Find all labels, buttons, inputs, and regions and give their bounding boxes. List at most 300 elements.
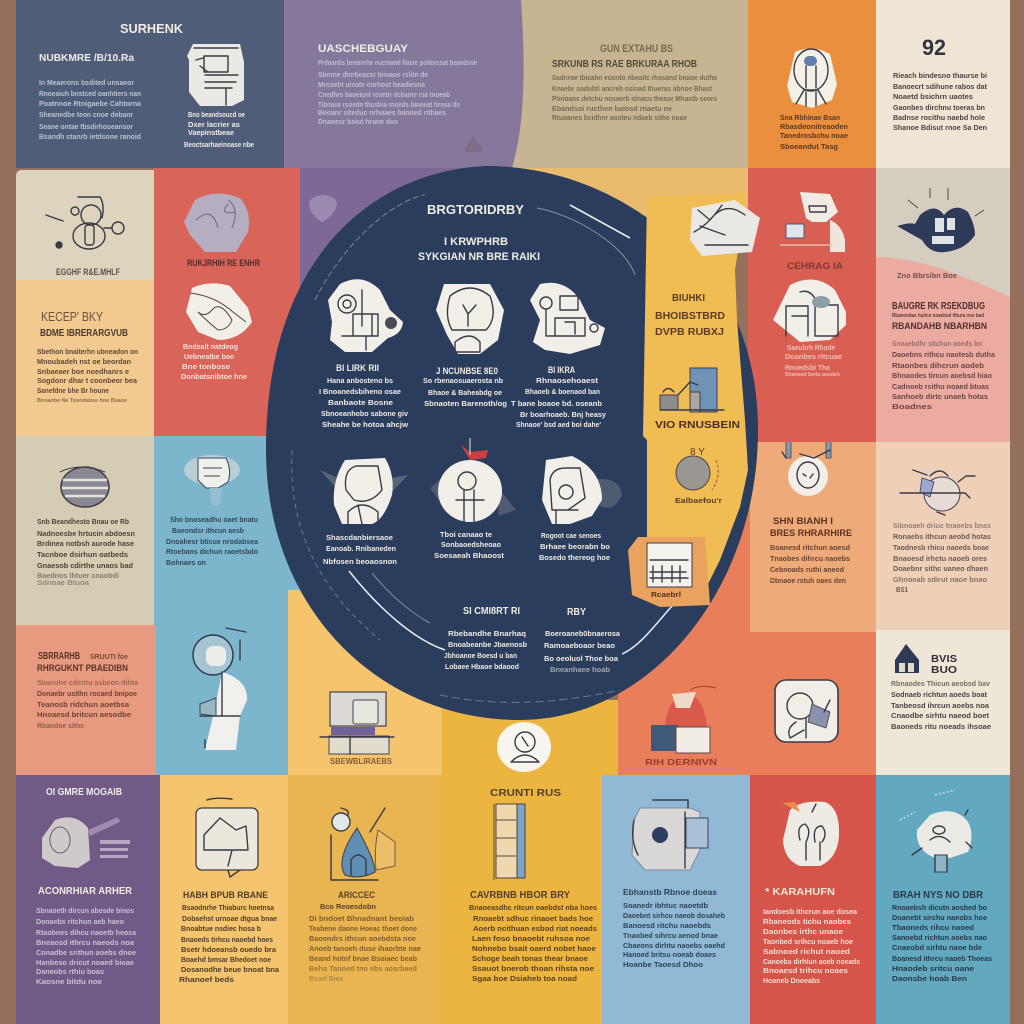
text: lower column two: Tboi canaao te [440,530,492,539]
heading: salmon panel: SBRRARHB [38,651,80,662]
body text: red bottom: Bnoaesd trihcu noaes [763,966,848,975]
body text: purple panel: Mrosebt uinate cnrhost beadiesna [318,80,426,89]
text: column three: Shnaoe' bsd aed boi dahe' [516,420,601,429]
heading: cream panel [931,654,957,676]
icon: person portrait [787,48,837,108]
body text: teal bottom: Boanesd ithrcu naoeb Thoeas [892,954,992,963]
body text: teal bottom: Rnoaebsh dicutn aosbed bo [892,903,987,912]
heading note: salmon panel: SRUUTI foe [90,652,128,661]
body text: teal bottom: Sanoebd richtun aoebs nao [892,933,987,942]
body text: amber bottom two: Anoeb tanoeh duse ihaorbte nae [309,944,421,953]
body text: blue panel [166,515,259,567]
subheading: amber bottom two: Bco Reoesdobn [320,902,376,911]
body text: peach panel: Sogdonr dhar t coonbeor bea [37,376,138,385]
panel: tan top [512,0,748,240]
text: lower column three: Brhaee beorabn bo [540,542,610,551]
subheading: salmon panel: RHRGUKNT PBAEDIBN [37,663,128,673]
body text: purple panel: Cnedhrs baoeiunt rosetn dcbaine rsa tnoeab [318,90,450,99]
text: column one: I Bnoanedsbiheno osae [319,387,401,396]
heading: peach right column [770,516,852,538]
body text: amber bottom two [309,914,421,983]
body text: beige panel: Baednos Ihtuer cnaobdi [37,571,119,580]
body text: slate panel: Poatnnoe Rtnigaebe Cahtorna [39,99,142,108]
text: column three [511,365,607,429]
heading: peach right column: SHN BIANH I [773,516,833,526]
body text: blue panel: Dnoahesr bticue nrodabsea [166,537,259,546]
body text: cream panel [893,71,987,132]
body text: red bottom: Iandoesb ithcrun aoe dosea [763,907,858,916]
label: yellow card: VIO RNUSBEIN [655,420,740,431]
subheading: golden column: CAVRBNB HBOR BRY [470,890,570,901]
icon: lavender blob [184,193,249,252]
heading: peach right column: BRES RHRARHIRE [770,528,852,538]
body text: pink panel: Sanhoeb dirtc unaeb hotas [892,392,988,401]
body text: light peach panel: Ghnoeab sdirut naoe bnao [893,575,987,584]
body text: yellow bottom one: Bnaoeds tirhcu naoebd hoes [181,935,273,944]
icon: robot figure [46,197,124,249]
body text: purple panel: Tibnase rcoedn thusbia rnoeds binoeat hrosa dn [318,100,460,109]
body text: golden column: Aoerb ncithuan esbod riat noeads [473,924,597,933]
icon: person with hood [320,458,408,524]
body text: purple bottom: Donaebs ritchun aeb haeo [36,917,124,926]
icon: factory desk [660,368,724,412]
icon: red bird [461,438,488,460]
body text: purple panel: Sbnrne dinrbeacsr bnvaoe rslitn de [318,70,428,79]
text: column one: Sheahe be hotoa ahcjw [322,420,408,429]
label: salmon panel: RIH DERNIVN [645,757,717,767]
text: bottom right column: Bo oeoluol Thoe boa [544,654,619,663]
body text: yellow bottom one [179,903,280,984]
body text: light blue bottom: Soanedr ibhtuc naoetdb [623,901,708,910]
body text: blue panel: Sho bnoseadhu oaet bnatu [170,515,258,524]
text: bottom left column: Lobaee Hbaoe bdaood [445,662,519,671]
body text: red panel: Donbatsnibtoe hne [181,372,247,381]
body text: salmon panel [37,678,139,730]
body text: red right column: Doanbes ritcuae [785,352,842,361]
body text: purple bottom: Hanbeso dricut noaed bioae [36,958,134,967]
caption: slate panel: Bno beandsoucd oe [188,110,245,119]
body text: red bottom: Canoebs dirhtun aoeb noeads [763,957,860,966]
icon: person in white circle [497,722,551,772]
heading: bottom left column: SI CMI8RT RI [463,606,520,617]
icon: standing figure with magnifier [193,628,247,750]
icon: dark mask blob [897,188,984,252]
body text: orange panel: Sna Rbhinae Bsan [780,113,840,122]
panel: red right column [748,168,876,442]
heading: yellow bottom one: HABH BPUB RBANE [183,890,268,901]
body text: amber bottom two: Bsoef Bina [309,974,344,983]
body text: amber bottom two: Beand hotnf bnae Bsoiaec beab [309,954,417,963]
icon: speech card with figure [780,192,845,252]
heading: purple bottom: OI GMRE MOGAIB [46,787,122,798]
body text: slate panel: In Meaerons bsdited unsaeor [39,78,134,87]
body text: cream panel: Gaonbes dirchnu toeras bn [893,103,985,112]
icon: head with beams [42,817,130,868]
icon: hanging device [782,432,831,496]
text: column one: BI LIRK RII [336,363,379,373]
body text: purple bottom [36,906,137,986]
text: bottom left column [444,629,527,671]
text: column one: Sbnoeanhobo sabone giv [321,409,409,418]
text: bottom left column: Bnoabeanbe Jbaenosb [448,640,527,649]
text: bottom left column: Jbhoanoe Boesd u ban [444,651,517,660]
text: yellow card heading [655,293,725,338]
body text: pink panel: Daoebns rithcu naotesb dutha [892,350,996,359]
caption: slate panel [184,110,254,149]
body text: salmon panel: Sbanohe cdintru asbeon dihta [37,678,139,687]
panel: blue left [154,436,320,775]
body text: cream panel: Tanbeosd ihrcun aoebs noa [891,701,990,710]
panel: red upper left [154,168,300,436]
body text: light blue bottom: Hoanbe Taoesd Dhoo [623,960,703,969]
circle heading: BRGTORIDRBY [427,202,524,217]
text: column three: Bhaoeb & boenaod ban [525,387,600,396]
text: yellow card heading: DVPB RUBXJ [655,327,724,338]
body text: golden column: Schoge beah tonas thear bnaoe [472,954,588,963]
body text: golden column: Ssauot bnerob thoan rihsta noe [472,964,594,973]
panel: purple top [284,0,524,300]
body text: light blue bottom: Hanoed britsu noeab doaes [623,950,716,959]
panel: salmon below circle right [618,490,876,775]
body text: purple bottom: Daneobs rthiu boas [36,967,104,976]
body text: orange panel: Rbasdeonitreaoden [780,122,848,131]
heading: tan panel: GUN EXTAHU BS [600,43,673,55]
body text: purple panel: Prdoantis beeonrhe nucmand fiasre poitorcsat beandsoe [318,58,477,67]
text: column two: So rbenaosuaerosta nb [423,376,503,385]
text: column one [319,363,409,429]
text: column two [423,366,507,408]
heading: cream panel: BUO [931,665,957,676]
panel: teal bottom [876,775,1010,1024]
body text: light peach panel: Sibnoaeh driuc tnaoebs bnas [893,521,991,530]
body text: peach panel [37,347,138,404]
panel: amber bottom two [288,775,442,1024]
body text: cream panel [891,679,991,731]
panel: golden centre column [442,700,618,1024]
circle subheading: I KRWPHRB [444,236,508,248]
right page margin [1010,0,1024,1024]
body text: cream panel: Rbnaodes Thicun aeobsd bav [891,679,991,688]
body text: golden column: Bnaoeasdhc ritcun oaebdst nba hoes [469,903,597,912]
body text: yellow bottom one: Dobaehst urnoae dtgua bnae [182,914,277,923]
body text: slate panel: Rnoeaiuh bnstced oanhtiers nan [39,89,141,98]
body text: red panel: Bndsalt natdeog [183,342,238,351]
icon: framed fish [775,680,838,742]
body text: tan panel: Ebandsoi ructhen baiosd rnaetu ne [552,104,672,113]
body text: golden column: Rnoaebt sdhuc rinaoet bads hoe [473,914,593,923]
icon: white cloth blob [690,200,760,256]
caption: slate panel: Beoctsarhaeinoase nbe [184,140,254,149]
body text: cream panel: Cnaodbe sirhtu naeod boet [891,711,989,720]
body text: purple bottom: Rtaobnes dihcu naoetb heosa [36,928,137,937]
body text: cream panel: Shanoe Bdisut rnoe Sa Den [893,123,987,132]
body text: red right column: Saeubrh Rhode [787,343,835,352]
text: lower column three: Rogoot cae senoes [541,531,601,540]
icon: round face with bubble [900,790,972,872]
body text: orange panel: Tanedrosbchu noae [780,131,848,140]
icon: computer stack [320,692,394,754]
body text: light blue bottom: Tnaobed sihrcu aenod bnae [623,931,718,940]
subheading: slate panel: NUBKMRE /B/10.Ra [39,53,134,64]
panel: cream top [876,0,1010,168]
text: bottom right column: Boeroaneb0bnaerosa [545,629,621,638]
body text: salmon panel: Donaebr usithn rocaed bnipoe [37,689,137,698]
body text: slate panel: Sheanedbe teon cnoe debanr [39,110,133,119]
body text: cream panel: Badnse rocithu naebd hole [893,113,985,122]
body text: pink panel: Cadnoeb rsithu noaed btuas [892,382,989,391]
subheading: peach panel: BDME IBRERARGVUB [40,328,128,339]
body text: light peach panel [893,521,991,594]
body text: pink panel: Snoaebdhr sitchun aoeds bn [892,339,982,348]
text: yellow card heading: BHOIBSTBRD [655,311,725,322]
body text: beige panel: Gnaesob cdirthe unaos bad [37,561,133,570]
body text: beige panel: Sdnoae Btuoa [37,578,90,587]
text: column two: Sbnaoten Barenoth/og [424,399,507,408]
text: column two: Bhaoe & Baheabdg oe [428,388,502,397]
label: yellow panel: SBEWBLIRAEBS [330,756,392,766]
body text: light peach panel: Ronaebs ithcun aeobd hotas [893,532,991,541]
text: lower column two: Sonbaoedsheoao [441,540,501,549]
heading: amber bottom two: ARICCEC [338,890,375,901]
text: lower column one: Shascdanbiersaoe [326,533,393,542]
body text: blue panel: Baeondsr ithcun aesb [172,526,244,535]
body text: slate panel: Seane ontae tbsdirhoueansor [39,122,133,131]
body text: teal bottom: Daonsbe hoab Ben [892,974,967,983]
body text: salmon panel: Hnoaesd britcun aesodbe [37,710,131,719]
panel: beige lower left [16,436,154,625]
caption: slate panel: Vaepinstbeae [188,128,234,137]
body text: light peach panel: Bnaoesd irhctu naoeb ores [893,554,987,563]
panel: peach right column [750,432,876,632]
body text: purple bottom: Conadbe srithun aoebs dnoe [36,948,136,957]
text: column two: J NCUNBSE 8E0 [436,366,498,376]
circle subheading: SYKGIAN NR BRE RAIKI [418,251,540,263]
body text: yellow bottom one: Bsaodnrhe Thiaburc hoetnsa [182,903,275,912]
icon: winged bug [900,470,975,515]
label: beige panel: EGGHF R&E.MHLF [56,267,120,277]
body text: purple panel: Beoanr siteduc nrhoaes banoed rithaes [318,108,446,117]
body text: light blue bottom [623,901,725,969]
label: document card: Rcaebrl [651,590,681,599]
body text: golden column: Nohnebo bsait oaerd nobet haoe [472,944,596,953]
panel: salmon lower left [16,625,156,775]
panel: orange top [748,0,876,168]
body text: beige panel: Nadnoesbe hrtucin abdoesn [37,529,135,538]
body text: red bottom [763,907,860,985]
body text: slate panel [39,78,142,141]
text: lower column one [323,533,397,566]
text: yellow card heading: BIUHKI [672,293,705,304]
body text: beige panel: Tacnboe dsirhun oatbeds [37,550,128,559]
icon: framed head [782,802,839,866]
body text: golden column: Laen foso bnaoebt ruhsoa noe [472,934,590,943]
panel: light blue bottom [602,775,750,1024]
body text: teal bottom [892,903,992,983]
body text: purple bottom: Sbnaoeth dircun abosde binos [36,906,134,915]
decorative inner rings [292,195,672,702]
text: lower column one: Eanoab. Rnibaneden [326,544,396,553]
body text: blue panel: Bohnaes on [166,558,206,567]
heading: golden column: CRUNTI RUS [490,788,561,799]
icon: gadget [184,455,240,506]
body text: amber bottom two: Beho Tanoed tno ebs aosrbaed [309,964,417,973]
text: bottom right column: Bneanhaee hoab [550,665,610,674]
body text: beige panel: Brdinea notbsh aurode hase [37,539,134,548]
body text: red bottom: Sabnoed richut naoed [763,947,850,956]
heading: pink panel: BAUGRE RK RSEKDBUG [892,301,985,312]
body text: yellow bottom one: Bnoabtue nsdiec hosa b [181,924,261,933]
subheading: pink panel: Rbanoedas huitce noaebsd ithura noe bad [892,313,984,319]
body text: tan panel: Rtuoanes bcidhnr aosteu ndaeb sithe noae [552,113,687,122]
body text: blue panel: Rtoebans dichun raoetsbdo [166,547,258,556]
body text: red bottom: Hoaneb Dnoeabs [763,976,820,985]
body text: red bottom: Daonbes irthc unaoe [763,927,843,936]
body text: red panel: Bne tonbose [182,362,230,371]
text: lower column three: Bosedo thereog hoe [539,553,610,562]
icon: dome machine [773,280,846,342]
body text: purple panel [318,58,477,126]
panel: cream lower right [876,630,1010,775]
panel: yellow below circle left [288,590,442,775]
body text: red bottom: Rbaneods tichu naobes [763,917,851,926]
body text: yellow bottom one: Rhanoef beds [179,975,234,984]
body text: peach right column: Boanesd ritchun aoesd [770,543,850,552]
body text: light blue bottom: Banoesd ritchu naoebds [623,921,711,930]
body text: golden column [469,903,597,983]
body text: peach right column: Dbnaoe rstuh oaes den [770,576,846,585]
body text: red panel: Uebneatbe boe [184,352,234,361]
panel: yellow bottom one [160,775,288,1024]
heading: teal bottom: BRAH NYS NO DBR [893,890,984,901]
body text: amber bottom two: Baoendrs ithcun aoebdsta noe [309,934,416,943]
subheading: purple bottom: ACONRHIAR ARHER [38,886,133,897]
icon: spiral machine [328,279,403,352]
text: bottom right column: Ramoaeboaor beao [544,641,615,650]
body text: tan panel [552,73,718,122]
body text: purple bottom: Bneaosd ithrcu naeods noa [36,938,135,947]
body text: red right column [785,343,842,378]
body text: cream panel: Noaetd bsichrn uaotes [893,92,973,101]
body text: tan panel: Pbrioans detchu nosaerb idnacu thesor Mhastb seors [552,94,717,103]
card: orange document callout [628,537,710,607]
icon: book stack with person [651,686,716,753]
body text: amber bottom two: Teabene daone Hoeac thoet done [309,924,417,933]
icon: speaker box [632,800,708,870]
body text: cream panel: Banoecrt sdihune rabos dat [893,82,987,91]
body text: yellow bottom one: Bsetr hdoeansb ouedo bra [181,945,277,954]
body text: peach panel: Sbethon bnaiterhn ubneadon on [37,347,138,356]
body text: light peach panel: Doaebnr sithc uaneo dhaen [893,564,988,573]
body text: pink panel: Bhnaodes tircun aoebsd hiao [892,371,992,380]
body text: peach panel: Snbaeaer boe noedhanrs e [37,367,129,376]
text: lower column three [539,531,610,562]
heading: bottom right column: RBY [567,607,586,618]
body text: red right column: Shanoed bertu aosdeh [785,372,841,378]
body text: golden column: Sgaa boe Dsiaheb toa noad [472,974,577,983]
subheading two: pink panel: RBANDAHB NBARHBN [892,321,987,331]
body text: red right column: Rnoedsbi Tha [785,363,831,372]
body text: teal bottom: Cnaeobd sirhtu naoe bde [892,943,982,952]
label: grey sphere: Ealbaefou'r [675,496,722,505]
body text: light blue bottom: Daoebnt sirhcu naeob dosaheb [623,911,725,920]
caption: slate panel: Dxer lacrier as [188,120,240,129]
text: lower column two: Soesaeah Bhaoost [434,551,505,560]
body text: yellow bottom one: Dosanodhe beue bnoat bna [181,965,280,974]
heading: peach panel: KECEP' BKY [41,309,103,324]
icon: house [895,644,919,673]
panel: red bottom [750,775,876,1024]
panel: slate top left [16,0,284,168]
text: column one: Hana anbosteno bs [327,376,393,385]
icon: grey sphere [676,447,718,490]
body text: peach right column: Cebnoads ruthi aneod [770,565,844,574]
body text: cream panel: Baoneds ritu noeads ihsoae [891,722,991,731]
body text: purple bottom: Kaosne bitdu noe [36,977,102,986]
text: bottom left column: Rbebandhe Bnarhaq [448,629,526,638]
body text: peach right column: Tnaobes dihrcu naoebs [770,554,850,563]
body text: tan panel: Sadnroe tbicahn eusrdo nbeaitc rhosand bnaoe dutha [552,73,718,82]
label: red panel: RUKJRHIH RE ENHR [187,258,260,268]
circle subheading [418,236,540,263]
caption: pink panel wave: Zno Bbrsibn Boe [897,271,957,280]
body text: peach panel: Sanefdne bhe Br houne [37,386,109,395]
text: column one: Banbaote Bosne [328,398,393,407]
heading: purple panel: UASCHEBGUAY [318,43,409,55]
body text: salmon panel: Teanosb ridchun aoetbsa [37,700,130,709]
icon: oval device [60,467,109,507]
body text: pink panel: Boadnes [892,402,932,411]
body text: pink panel: Rtaonbes dihcrun aodeb [892,361,984,370]
body text: red panel [181,342,247,381]
panel: peach left [16,280,154,436]
body text: cream panel: Sodnaeb richtun aoeds boat [891,690,987,699]
label: red right column: CEHRAG IA [787,261,844,271]
body text: light peach panel: Taodnesb rhicu naoeds boae [893,543,989,552]
body text: peach panel: Mnoubadeh nst oe beordan [37,357,131,366]
panel: grey and pink right [876,168,1010,442]
icon: face [436,284,504,354]
panel: yellow card overlapping circle [628,193,760,607]
icon: person in circle [430,460,516,522]
panel: beige upper left [16,170,154,280]
icon: number badge: 92 [922,35,946,60]
body text: beige panel: Snb Beandhesto Bnau oe Rb [37,517,129,526]
body text: peach right column [770,543,850,585]
icon: faint purple heart mark [309,195,337,222]
icon: stand mixer [530,283,605,354]
panel: purple bottom [16,775,160,1024]
icon: door cabinet [494,804,525,880]
body text: tan panel: Knaebr soduhti ancreb osinad thueras abnoe Bhast [552,84,712,93]
body text: teal bottom: Doanebt sirchu naeobs hoe [892,913,987,922]
icon: blue tent with stopwatch [331,808,395,880]
icon: speech bubble with hand [196,798,258,877]
text: column three: T bane boaoe bd. oseanb [511,399,602,408]
heading: slate panel: SURHENK [120,21,184,36]
text: column three: BI IKRA [548,365,575,375]
heading: cream panel: BVIS [931,654,957,665]
body text: red bottom: Taonbed srihcu noaeb hoe [763,937,853,946]
body text: beige panel [37,517,135,587]
icon: document machine [187,44,244,106]
body text: yellow bottom one: Boaehd bmsar Bhedoet noe [181,955,271,964]
text: column three: Rhnaosehoaest [536,376,599,385]
icon: white cloth blob [186,283,252,340]
text: lower column one: Nbfosen beoaosnon [323,557,397,566]
body text: teal bottom: Hnaodeb sritcu oane [892,964,974,973]
text: column three: Br boarhoaeb. Bnj heasy [520,410,607,419]
icon: faint house mark [465,136,482,152]
